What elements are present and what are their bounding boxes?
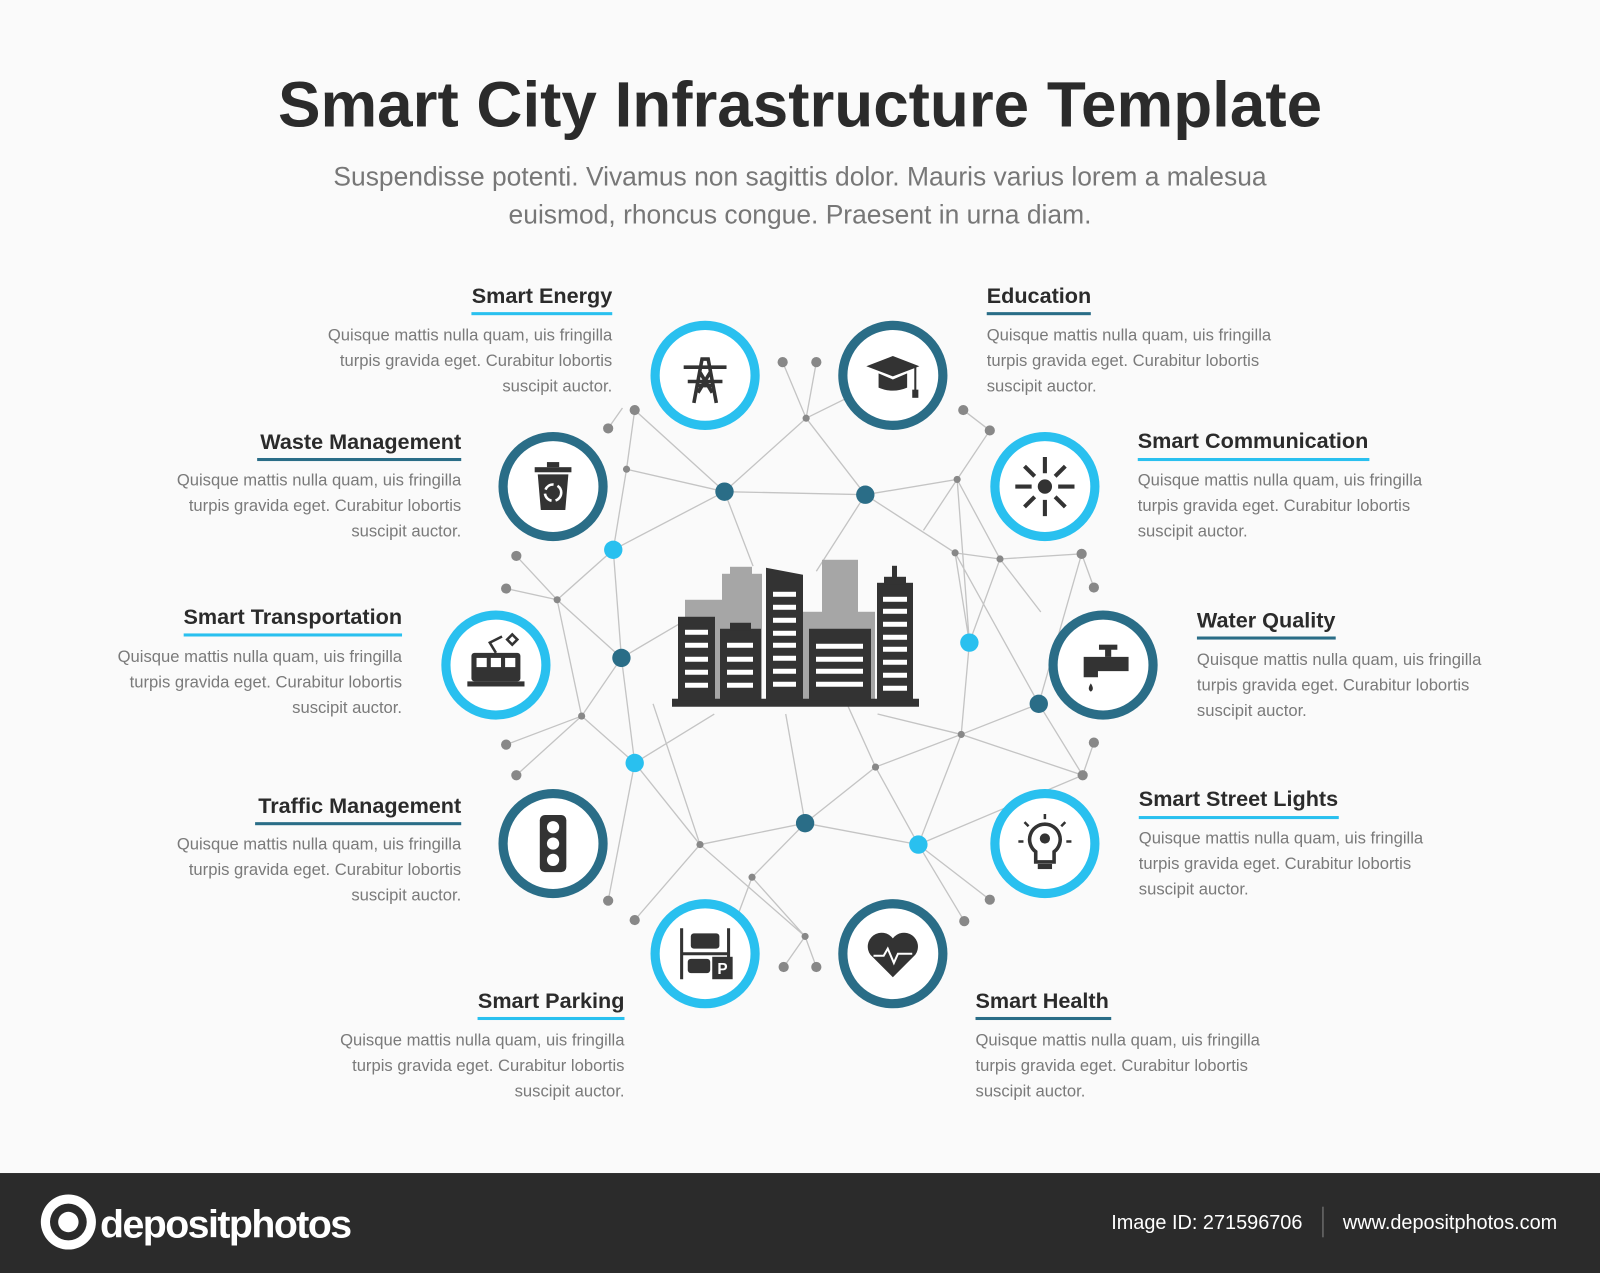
ring: smart transportation — [446, 615, 546, 715]
block: smart health: turpis gravida eget. Curabitur lobortis — [976, 1056, 1248, 1075]
footer id — [1111, 1207, 1557, 1237]
block: waste management: turpis gravida eget. Curabitur lobortis — [189, 496, 461, 515]
block: smart parking: Smart Parking — [478, 988, 624, 1013]
block: water quality: turpis gravida eget. Curabitur lobortis — [1197, 676, 1469, 695]
block: traffic management — [177, 793, 462, 905]
block: smart transportation — [118, 604, 403, 717]
ring: smart communication — [995, 437, 1095, 537]
title: Smart City Infrastructure Template — [278, 68, 1322, 140]
block: traffic management: Traffic Management — [258, 793, 461, 818]
block: smart communication: suscipit auctor. — [1138, 522, 1248, 541]
block: smart energy: Quisque mattis nulla quam, uis fringilla — [328, 326, 613, 345]
block: smart health: Quisque mattis nulla quam, uis fringilla — [976, 1031, 1261, 1050]
footer logo — [41, 1194, 351, 1250]
network lines — [506, 362, 1094, 967]
block: traffic management: Quisque mattis nulla quam, uis fringilla — [177, 835, 462, 854]
block: waste management — [177, 429, 462, 541]
block: smart energy: Smart Energy — [472, 283, 612, 308]
block: smart health: Smart Health — [976, 988, 1109, 1013]
block: traffic management: turpis gravida eget. Curabitur lobortis — [189, 860, 461, 879]
ring: smart parking — [655, 904, 755, 1004]
block: smart energy: suscipit auctor. — [502, 377, 612, 396]
block: smart communication: turpis gravida eget. Curabitur lobortis — [1138, 496, 1410, 515]
block: smart health — [976, 988, 1261, 1101]
block: smart energy: turpis gravida eget. Curabitur lobortis — [340, 351, 612, 370]
block: smart transportation: turpis gravida eget. Curabitur lobortis — [130, 673, 402, 692]
block: smart energy — [328, 283, 613, 396]
block: education: Education — [987, 283, 1091, 308]
block: waste management: Waste Management — [260, 429, 461, 454]
block: smart transportation: Smart Transportation — [183, 604, 402, 629]
ring: smart street lights — [995, 794, 1095, 894]
block: smart transportation: suscipit auctor. — [292, 698, 402, 717]
block: smart communication: Smart Communication — [1138, 428, 1368, 453]
block: education — [987, 283, 1272, 396]
block: education: Quisque mattis nulla quam, uis fringilla — [987, 326, 1272, 345]
block: education: turpis gravida eget. Curabitur lobortis — [987, 351, 1259, 370]
block: waste management: suscipit auctor. — [351, 522, 461, 541]
block: smart parking: suscipit auctor. — [515, 1082, 624, 1101]
block: water quality — [1197, 607, 1482, 720]
block: water quality: Water Quality — [1197, 607, 1335, 632]
block: smart street lights — [1139, 786, 1424, 899]
subtitle — [333, 162, 1267, 229]
block: water quality: suscipit auctor. — [1197, 701, 1307, 720]
block: education: suscipit auctor. — [987, 377, 1097, 396]
block: smart parking — [340, 988, 625, 1101]
block: water quality: Quisque mattis nulla quam, uis fringilla — [1197, 650, 1482, 669]
footer logo: depositphotos — [100, 1202, 351, 1246]
block: smart street lights: suscipit auctor. — [1139, 880, 1249, 899]
ring: water quality — [1053, 615, 1153, 715]
block: smart transportation: Quisque mattis nulla quam, uis fringilla — [118, 647, 403, 666]
block: smart health: suscipit auctor. — [976, 1082, 1085, 1101]
icon: city skyline — [672, 560, 919, 707]
ring: smart energy — [655, 325, 755, 425]
network dots — [501, 357, 1099, 972]
block: smart street lights: Smart Street Lights — [1139, 786, 1338, 811]
ring: smart parking: P — [717, 961, 728, 978]
block: smart communication: Quisque mattis nulla quam, uis fringilla — [1138, 471, 1423, 490]
ring: traffic management — [503, 794, 603, 894]
block: waste management: Quisque mattis nulla quam, uis fringilla — [177, 471, 462, 490]
ring: smart health — [843, 904, 943, 1004]
block: smart street lights: turpis gravida eget. Curabitur lobortis — [1139, 854, 1411, 873]
block: smart parking: turpis gravida eget. Curabitur lobortis — [352, 1056, 624, 1075]
block: smart communication — [1138, 428, 1423, 541]
subtitle: Suspendisse potenti. Vivamus non sagittis dolor. Mauris varius lorem a malesua — [333, 162, 1267, 192]
block: traffic management: suscipit auctor. — [351, 886, 461, 905]
ring: education — [843, 325, 943, 425]
footer bar — [0, 1173, 1600, 1273]
block: smart parking: Quisque mattis nulla quam, uis fringilla — [340, 1031, 625, 1050]
footer id: Image ID: 271596706 — [1111, 1212, 1302, 1234]
footer id: www.depositphotos.com — [1342, 1212, 1557, 1234]
subtitle: euismod, rhoncus congue. Praesent in urna diam. — [509, 199, 1091, 229]
block: smart street lights: Quisque mattis nulla quam, uis fringilla — [1139, 829, 1424, 848]
ring: waste management — [503, 437, 603, 537]
